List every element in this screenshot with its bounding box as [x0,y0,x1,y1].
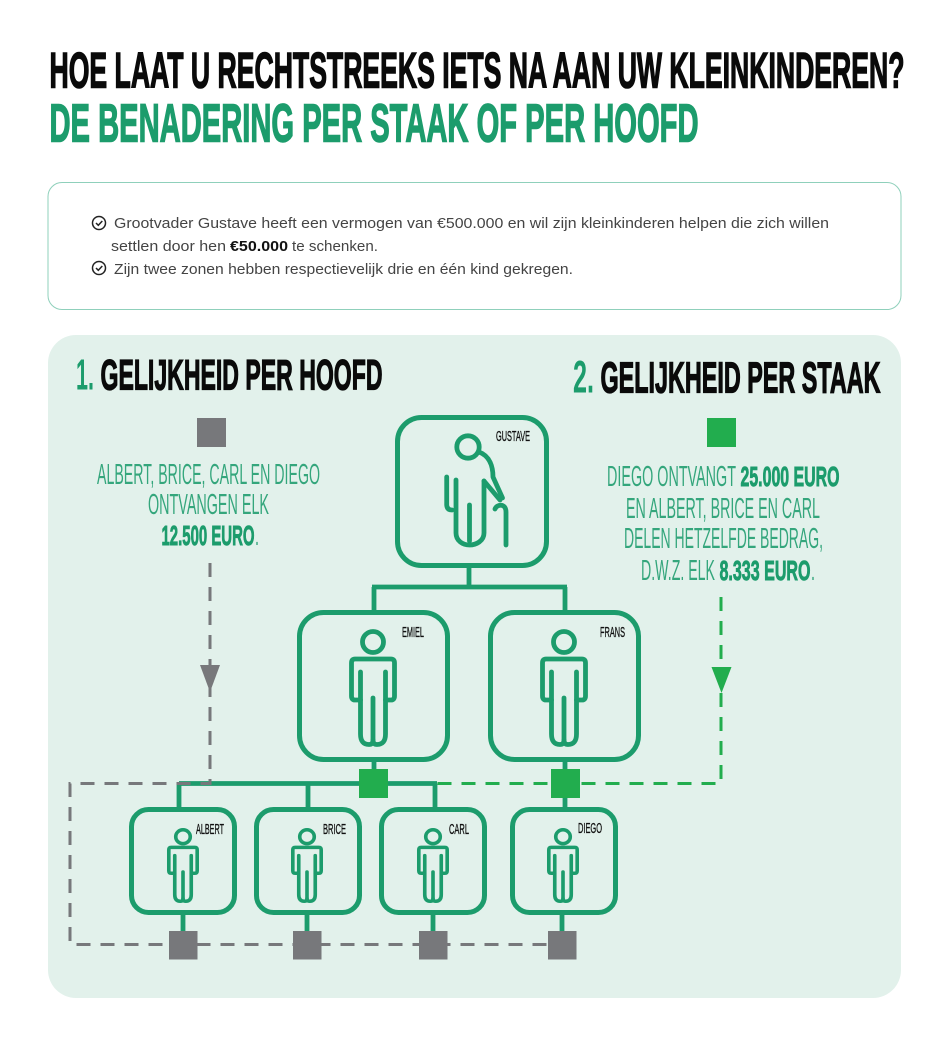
text block: per staak [607,461,840,587]
node: Frans [490,612,638,760]
panel: family tree background [48,335,901,998]
text block: per staak: D.W.Z. ELK [641,555,715,587]
heading: gelijkheid per hoofd: 1. [76,350,94,400]
node: Emiel: EMIEL [402,624,424,641]
node: Albert: ALBERT [196,821,224,838]
tree connectors [179,565,567,931]
node: Diego: DIEGO [578,820,602,837]
icon: check circle [92,216,106,230]
icon: person [352,632,394,744]
node: Frans: FRANS [600,624,625,641]
icon: grandfather with cane [447,436,506,545]
title [50,42,905,154]
text block: per staak: . [811,555,815,587]
panel: intro text box: Zijn twee zonen hebben respectievelijk drie en één kind gekregen. [114,262,573,278]
heading: gelijkheid per staak: 2. [573,352,594,402]
arrow: green dashed path [388,597,732,784]
heading: gelijkheid per hoofd [76,350,382,400]
node: Carl [382,810,484,912]
markers: grey squares under grandchildren [169,931,576,960]
marker: green square under Frans [551,769,580,798]
legend: grey square [197,418,226,447]
panel: intro text box: €50.000 [230,239,288,255]
text: ALBERT, BRICE, CARL EN DIEGO [97,459,320,491]
text block: per hoofd: 12.500 EURO [162,520,254,551]
legend: green square [707,418,736,447]
node: Brice: BRICE [323,821,346,838]
text block: per hoofd [97,459,320,552]
text block: per staak: DIEGO ONTVANGT [607,461,736,493]
text block: per hoofd: ONTVANGEN ELK [148,489,269,521]
panel: intro text box: settlen door hen [111,239,226,255]
icon: person [419,830,447,901]
text block: per staak: 25.000 EURO [740,461,840,492]
node: Albert [132,810,234,912]
panel: intro text box [48,182,901,310]
icon: person [549,830,577,901]
node: Emiel [300,612,448,760]
node: Carl: CARL [449,821,469,838]
panel: intro text box: te schenken. [292,239,378,255]
text block: per hoofd: . [255,520,259,552]
icon: person [542,632,586,744]
node: Diego [512,810,616,912]
text block: per staak: 8.333 EURO [720,555,810,586]
node: Gustave: GUSTAVE [496,428,530,445]
node: Brice [256,810,360,912]
icon: person [169,830,197,901]
panel: intro text box: Grootvader Gustave heeft een vermogen van €500.000 en wil zijn kleinkinderen helpen die zich willen [114,216,829,232]
arrow: grey dashed path [70,563,562,944]
heading: gelijkheid per hoofd: GELIJKHEID PER HOOFD [100,352,382,400]
icon: person [293,830,321,901]
marker: green square under Emiel [359,769,388,798]
node: Gustave [398,418,546,566]
